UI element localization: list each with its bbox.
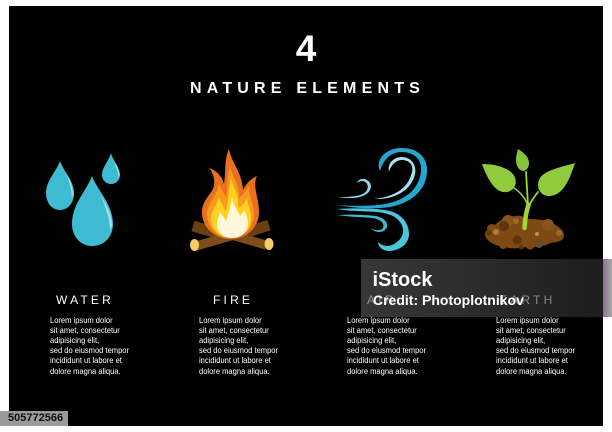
text block: earth: dolore magna aliqua. [496, 366, 567, 376]
icon: campfire [190, 149, 274, 251]
text block: earth: sed do eiusmod tempor [496, 345, 575, 355]
text block: air: sit amet, consectetur [347, 325, 417, 335]
text block: air [347, 314, 426, 376]
leaf: top [516, 149, 529, 171]
label: fire: FIRE [213, 292, 253, 306]
icon: wind swirls [336, 148, 428, 251]
leaf: left [482, 164, 516, 192]
text block: air: incididunt ut labore et [347, 355, 419, 365]
text block: earth: incididunt ut labore et [496, 355, 568, 365]
icon: sprout in soil [482, 149, 575, 250]
text block: water: incididunt ut labore et [50, 355, 122, 365]
text block: air: dolore magna aliqua. [347, 366, 418, 376]
text block: fire [199, 314, 278, 376]
watermark credit: Credit: Photoplotnikov [373, 292, 524, 308]
text block: water [50, 314, 129, 376]
watermark band [361, 259, 612, 317]
soil mound [485, 215, 564, 250]
text block: earth: adipisicing elit, [496, 335, 545, 345]
label: earth: EARTH [499, 292, 555, 306]
stems [514, 172, 538, 228]
text block: air: adipisicing elit, [347, 335, 396, 345]
text block: fire: incididunt ut labore et [199, 355, 271, 365]
text block: air: sed do eiusmod tempor [347, 345, 426, 355]
text block: fire: dolore magna aliqua. [199, 366, 270, 376]
icon: water drops [46, 153, 120, 246]
text block: water: Lorem ipsum dolor [50, 314, 113, 324]
text block: earth: Lorem ipsum dolor [496, 314, 559, 324]
image id tag [0, 411, 68, 426]
text block: fire: adipisicing elit, [199, 335, 248, 345]
text block: earth: sit amet, consectetur [496, 325, 566, 335]
text block: water: sed do eiusmod tempor [50, 345, 129, 355]
text block: fire: sed do eiusmod tempor [199, 345, 278, 355]
text block: water: adipisicing elit, [50, 335, 99, 345]
text block: fire: Lorem ipsum dolor [199, 314, 262, 324]
image id tag: 505772566 [8, 412, 63, 424]
text block: water: dolore magna aliqua. [50, 366, 121, 376]
text block: water: sit amet, consectetur [50, 325, 120, 335]
label: water: WATER [56, 292, 114, 306]
label: air: AIR [367, 292, 397, 306]
leaf: right [538, 163, 575, 196]
watermark logo: iStock [372, 269, 433, 291]
text block: fire: sit amet, consectetur [199, 325, 269, 335]
title: 4: 4 [296, 28, 316, 69]
text block: air: Lorem ipsum dolor [347, 314, 410, 324]
heading: nature elements: NATURE ELEMENTS [190, 80, 425, 96]
text block: earth [496, 314, 575, 376]
